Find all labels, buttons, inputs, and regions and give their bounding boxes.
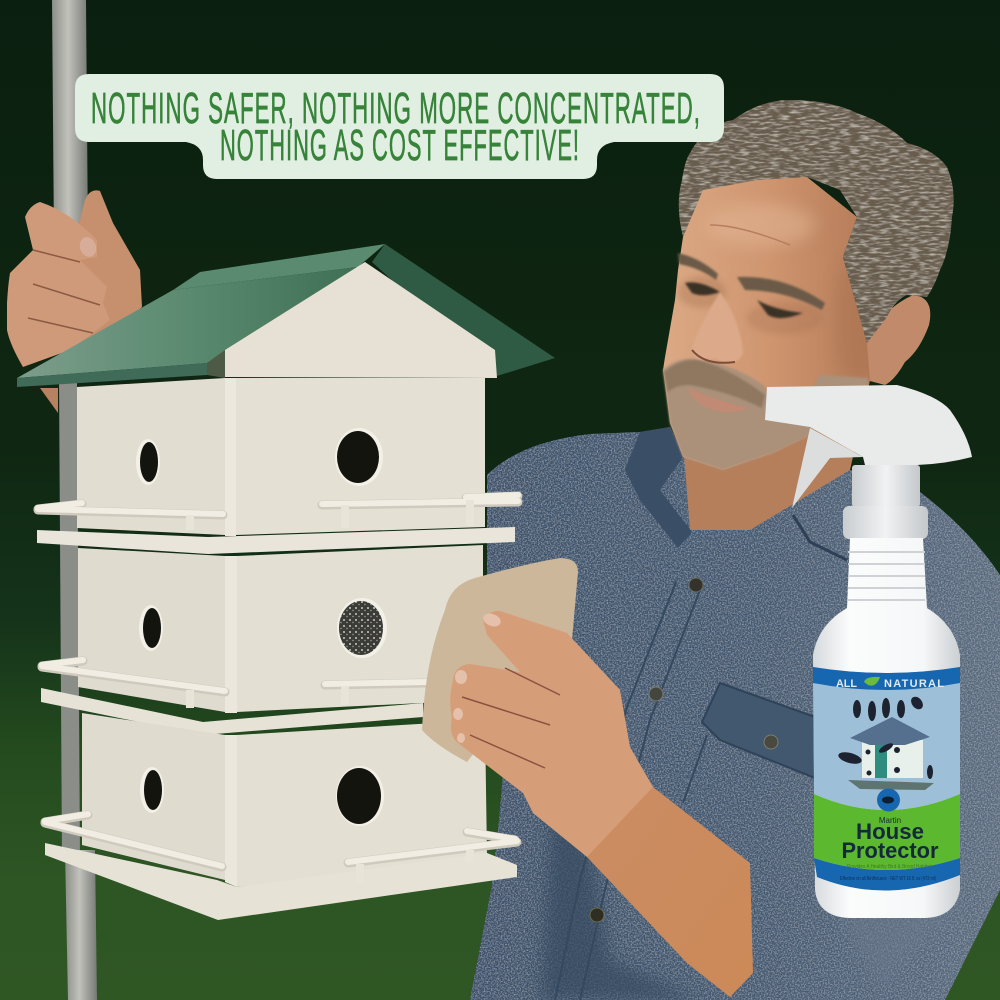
face (663, 177, 870, 470)
shirt (470, 427, 1000, 1000)
label: sky panel (813, 667, 960, 810)
label: top blue band: NATURAL (884, 678, 944, 690)
product: spray bottle (765, 385, 972, 918)
top floor (77, 378, 485, 536)
fingers (7, 202, 110, 367)
middle floor (78, 545, 483, 713)
headline text: NOTHING AS COST EFFECTIVE! (220, 121, 580, 170)
hand silhouette (450, 611, 653, 857)
ear (866, 295, 930, 385)
shirt shading, placket and pocket (540, 427, 960, 1000)
eyebrows (678, 253, 825, 310)
product name: Protector (842, 838, 939, 863)
middle ledge and rails (41, 660, 427, 735)
eyes (685, 282, 803, 318)
spray head (765, 385, 972, 465)
hair (679, 100, 954, 343)
pole (52, 0, 97, 1000)
gable (225, 262, 497, 378)
top ledge and rails (37, 495, 518, 554)
birdhouse (17, 244, 555, 920)
headline text (91, 84, 701, 170)
label: green panel (814, 794, 960, 870)
fingernails (453, 611, 503, 743)
label: bottom blue band: Effective on all Birdhouses · NET WT 16 fl. oz (473 ml) (840, 876, 936, 882)
neck (684, 380, 870, 530)
mouth (688, 388, 748, 412)
label: bird badge (877, 788, 900, 812)
headline speech bubble (75, 74, 724, 179)
cap (843, 506, 928, 539)
neck threads (848, 552, 925, 600)
forearm (587, 770, 753, 997)
bubble shape (75, 74, 724, 179)
product name: House (856, 819, 924, 844)
product name: Martin (879, 816, 901, 825)
roof (17, 244, 555, 387)
face shading (678, 202, 858, 358)
beard (663, 359, 868, 470)
thumb and palm (60, 190, 142, 350)
upper hand gripping pole (7, 190, 142, 413)
ribbed collar (852, 465, 920, 507)
man (470, 100, 1000, 1000)
label: bottom blue band (814, 858, 960, 891)
moustache (664, 360, 765, 408)
label: top blue band: ALL (836, 678, 857, 690)
bottom floor (82, 713, 487, 887)
cleaning cloth (422, 558, 578, 762)
finger creases (28, 250, 100, 333)
bottom ledge and rails (45, 814, 517, 920)
spray trigger (792, 428, 863, 508)
threaded neck and body (813, 538, 960, 918)
product name (842, 816, 939, 870)
thumbnail (77, 235, 99, 259)
nose (692, 292, 743, 363)
finger creases (462, 668, 560, 768)
label: martin house and birds (837, 694, 934, 790)
cleaning hand (450, 611, 653, 857)
product name: Provides A Healthy Bird & Brood Habitat (847, 864, 932, 870)
label: top blue band (813, 667, 960, 690)
